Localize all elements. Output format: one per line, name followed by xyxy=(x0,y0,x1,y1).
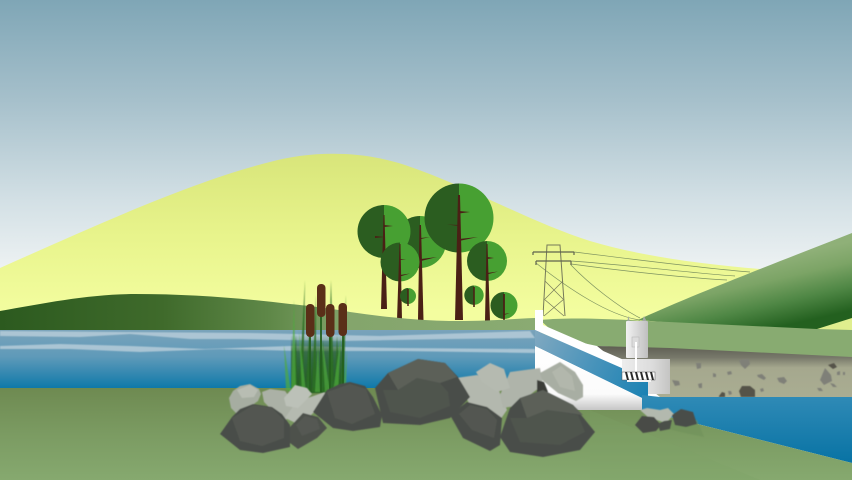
tree: small near left xyxy=(400,288,416,306)
concrete speckles xyxy=(672,359,845,397)
power lines xyxy=(536,252,750,320)
tree: small middle xyxy=(464,286,484,307)
right green hill xyxy=(638,233,852,330)
gate base block xyxy=(622,359,670,394)
rock shadow xyxy=(655,420,704,437)
foreground ground xyxy=(0,388,852,480)
dark green left hill xyxy=(0,294,540,335)
dark rock: right large xyxy=(500,390,595,457)
dam: white upper wall xyxy=(535,310,624,369)
ground shadow facet xyxy=(590,410,760,480)
gate stem xyxy=(635,342,637,372)
striped grating xyxy=(622,372,655,382)
concrete retaining wall xyxy=(597,346,852,398)
green bank xyxy=(540,318,852,358)
tree: small right xyxy=(490,292,518,323)
water highlights xyxy=(0,331,535,353)
small dark rocks xyxy=(635,416,661,433)
dark rock: left small xyxy=(290,413,327,449)
yellow hill patch right xyxy=(817,318,852,334)
sky background xyxy=(0,0,852,335)
trees xyxy=(358,184,518,323)
dark rock: centre left xyxy=(313,382,382,431)
pylon xyxy=(533,245,574,316)
main river water xyxy=(0,330,540,389)
dark rock: right small xyxy=(450,402,502,451)
cattail heads xyxy=(306,284,347,337)
tower cylinder xyxy=(626,316,648,358)
gate tower xyxy=(622,316,670,394)
tree: front left xyxy=(380,242,420,320)
dark rock: left large xyxy=(220,404,290,453)
small rock cluster xyxy=(635,408,704,437)
cattail stems xyxy=(310,312,343,392)
tree: right xyxy=(467,241,507,321)
cattails and reeds xyxy=(284,280,347,393)
tree: large central xyxy=(424,184,494,320)
large yellow-green hill xyxy=(0,154,852,340)
rock pile xyxy=(220,359,595,457)
dam: sloped water channel xyxy=(535,330,648,398)
dark rock: centre large xyxy=(375,359,470,425)
light rocks right xyxy=(456,362,583,420)
light rocks left xyxy=(229,384,325,425)
right channel water xyxy=(642,395,852,463)
small light rocks xyxy=(640,408,674,423)
dam: white lower wall xyxy=(535,346,642,410)
tree: back centre xyxy=(394,216,446,320)
tree: left xyxy=(358,205,410,309)
reed blades xyxy=(284,280,347,393)
